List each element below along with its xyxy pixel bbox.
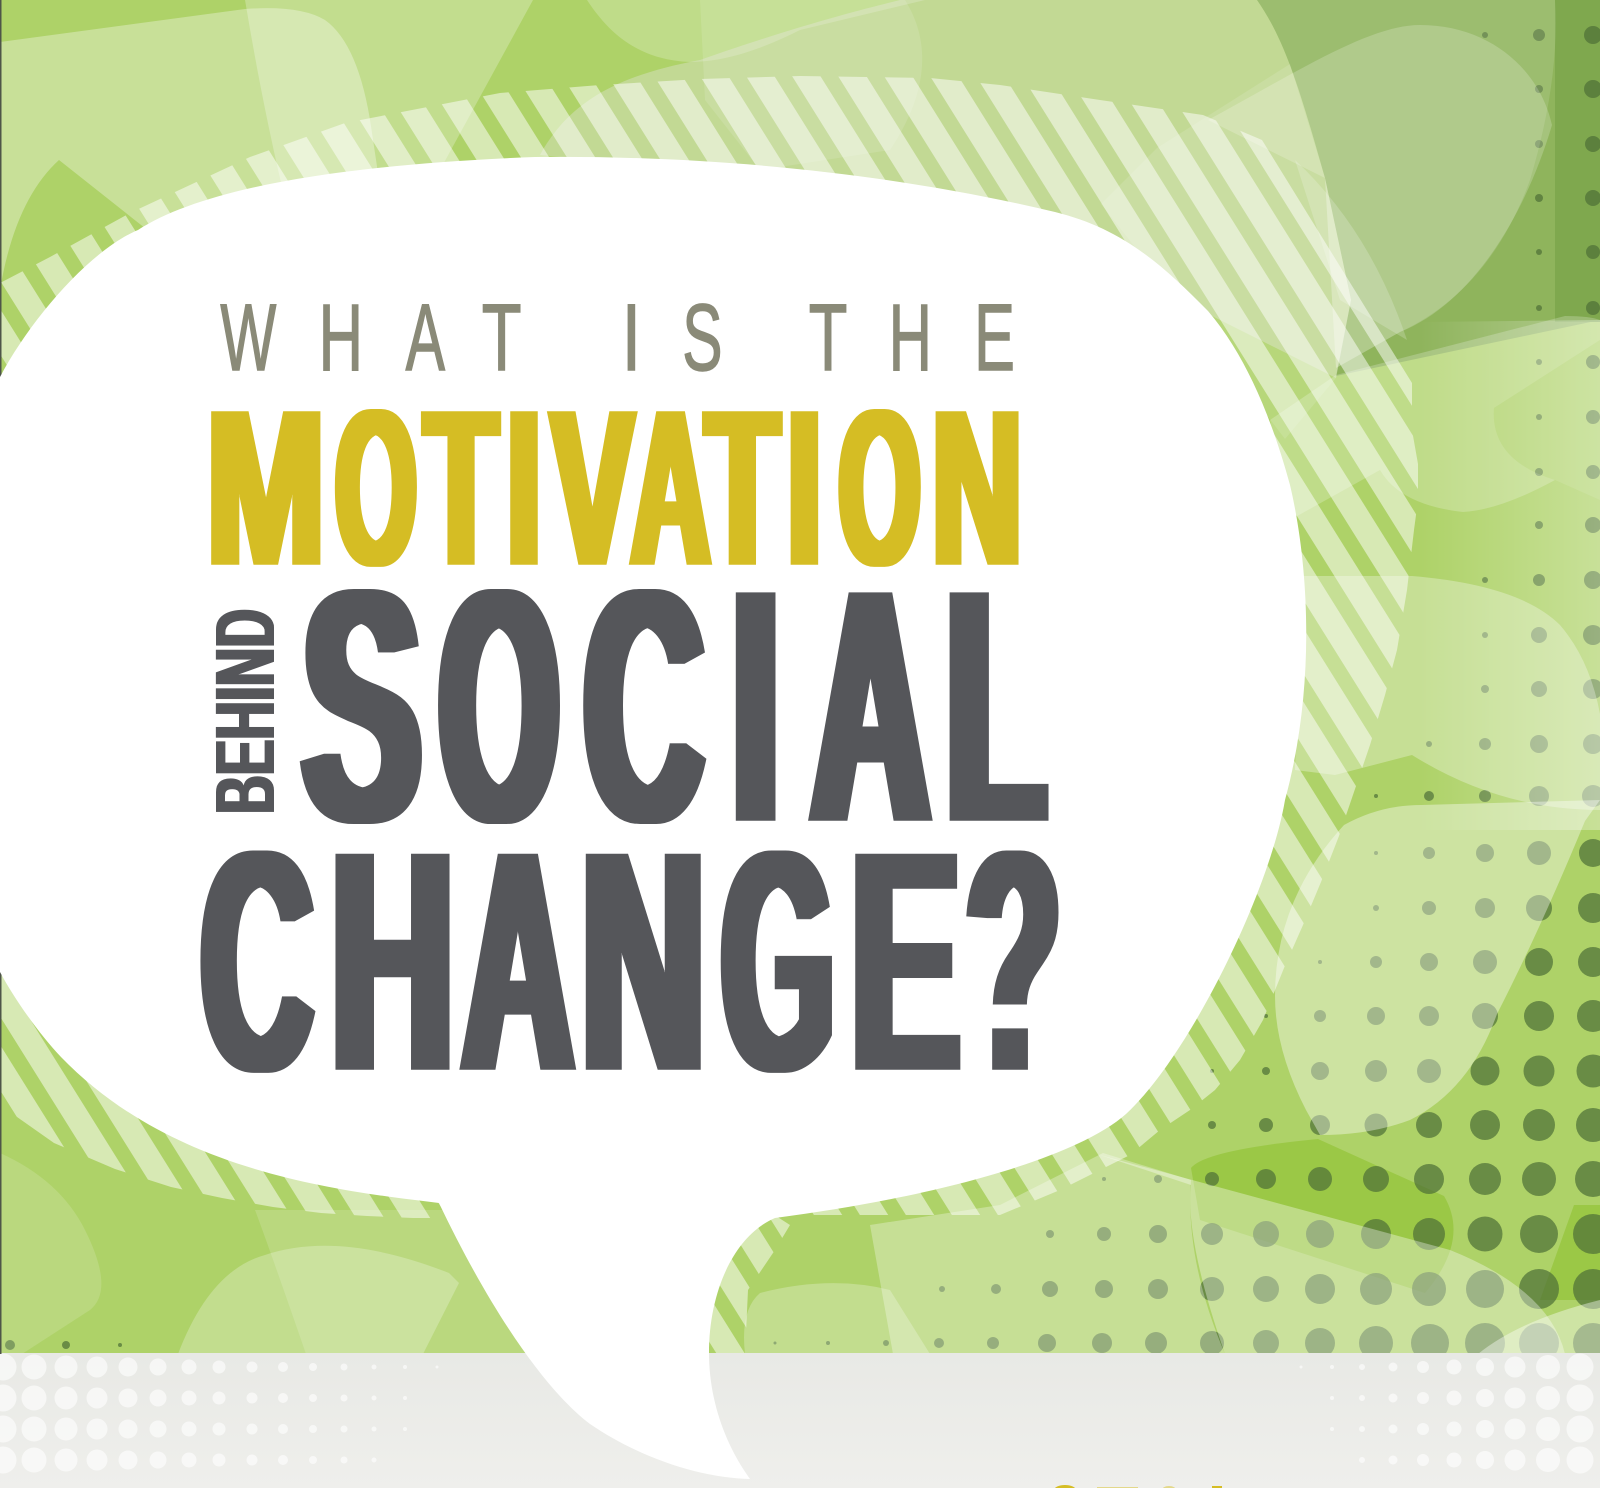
heading: SOCIAL: A bbox=[812, 521, 929, 892]
heading: CHANGE?: C bbox=[201, 786, 313, 1137]
heading: MOTIVATION: N bbox=[932, 364, 1022, 613]
heading: MOTIVATION: O bbox=[336, 364, 416, 613]
infographic canvas: ? bbox=[966, 786, 1060, 1137]
heading: MOTIVATION: A bbox=[631, 364, 710, 613]
heading: CHANGE?: H bbox=[331, 786, 454, 1137]
diagonal stripe band bbox=[0, 76, 1418, 1354]
clipped yellow lettering at bottom edge bbox=[1054, 1485, 1222, 1488]
left dot pattern bbox=[3, 1367, 437, 1460]
heading: WHAT IS THE: S bbox=[682, 285, 723, 391]
heading: SOCIAL: S bbox=[303, 521, 421, 892]
speech bubble bbox=[0, 157, 1306, 1479]
right dot pattern bbox=[1301, 1367, 1580, 1460]
heading: WHAT IS THE: W bbox=[220, 285, 277, 391]
heading: MOTIVATION: M bbox=[207, 364, 325, 613]
title bbox=[198, 285, 1060, 1137]
heading: MOTIVATION: I bbox=[507, 364, 541, 613]
heading: CHANGE?: A bbox=[462, 786, 573, 1137]
overlay blobs above the stripes bbox=[1101, 64, 1407, 439]
bottom grey band bbox=[0, 1353, 1600, 1488]
heading: SOCIAL: I bbox=[733, 521, 778, 892]
heading: MOTIVATION: O bbox=[839, 364, 920, 613]
heading: CHANGE?: E bbox=[851, 786, 960, 1137]
heading: SOCIAL: C bbox=[584, 521, 703, 892]
title: L bbox=[947, 521, 1046, 892]
rotated word: BEHIND: BEHIND bbox=[198, 609, 292, 814]
heading: WHAT IS THE: A bbox=[406, 285, 445, 391]
heading: MOTIVATION: I bbox=[788, 364, 821, 613]
heading: WHAT IS THE: I bbox=[622, 285, 641, 391]
heading: WHAT IS THE: H bbox=[319, 285, 363, 391]
left edge line bbox=[0, 0, 2, 1354]
heading: WHAT IS THE: T bbox=[482, 285, 520, 391]
heading: WHAT IS THE: T bbox=[809, 285, 847, 391]
heading: WHAT IS THE: E bbox=[974, 285, 1015, 391]
heading: MOTIVATION: V bbox=[551, 364, 634, 613]
heading: WHAT IS THE: H bbox=[889, 285, 932, 391]
heading: SOCIAL: O bbox=[440, 521, 558, 892]
heading: MOTIVATION: T bbox=[425, 364, 498, 613]
heading: CHANGE?: G bbox=[722, 786, 834, 1137]
heading: CHANGE?: N bbox=[581, 786, 705, 1137]
heading: MOTIVATION: T bbox=[706, 364, 779, 613]
